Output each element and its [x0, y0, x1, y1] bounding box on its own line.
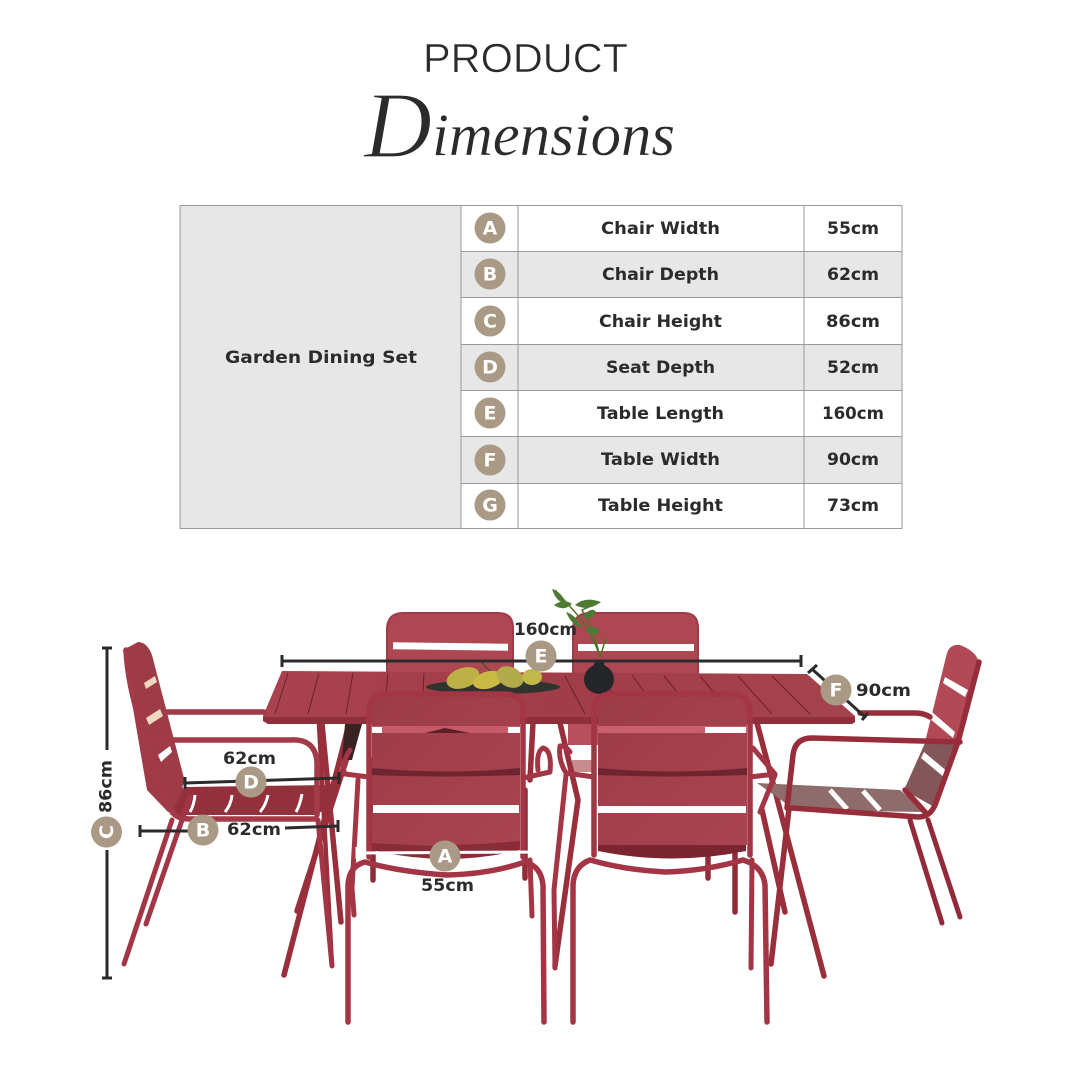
title [362, 35, 675, 178]
row A: Chair Width [601, 219, 720, 238]
title line: Dimensions: imensions [432, 102, 675, 168]
dimension E: table length: E [535, 646, 547, 668]
dimension D: seat depth [185, 749, 339, 798]
table legs [284, 722, 824, 976]
fruit plate [426, 660, 560, 694]
row A: 55cm [827, 219, 879, 238]
seat [170, 785, 336, 815]
dimension D: seat depth: D [243, 772, 259, 794]
row E: E [484, 402, 496, 424]
row D: 52cm [827, 358, 879, 377]
dimension C: chair height: 86cm [96, 760, 116, 813]
dimension D: seat depth: 62cm [223, 749, 276, 768]
row E: 160cm [822, 404, 884, 423]
row A: A [483, 218, 498, 240]
row C [474, 306, 880, 336]
arms [554, 746, 775, 968]
left side chair [123, 642, 336, 966]
row E: Table Length [597, 404, 724, 423]
row C: 86cm [826, 312, 880, 331]
dimension C: chair height: C [96, 825, 118, 839]
title line: PRODUCT: PRODUCT [423, 35, 628, 81]
row B: Chair Depth [602, 265, 719, 284]
row label: Garden Dining Set: Garden Dining Set [225, 348, 417, 367]
legs [124, 797, 332, 966]
title line: Dimensions: D [362, 74, 432, 178]
chair back [598, 697, 747, 845]
legs [910, 820, 960, 923]
table leg shadow [342, 724, 362, 760]
dimension A: chair width [357, 840, 533, 895]
pears [444, 662, 542, 693]
row F: Table Width [601, 450, 720, 469]
arms [343, 748, 550, 916]
row A [474, 212, 879, 244]
dimension A: chair width: 55cm [421, 876, 474, 895]
row B [474, 258, 879, 290]
frame [348, 694, 544, 1022]
dimensions table [180, 205, 902, 528]
row F: 90cm [827, 450, 879, 469]
row B: B [483, 264, 497, 286]
furniture illustration [123, 589, 979, 1022]
dimension annotations [91, 620, 911, 978]
row C: Chair Height [599, 312, 722, 331]
row F: F [484, 450, 496, 472]
dimension E: table length: 160cm [514, 620, 577, 639]
row B: 62cm [827, 265, 879, 284]
dimension B: chair depth [140, 814, 338, 846]
table top [263, 671, 855, 724]
row F [474, 444, 879, 476]
back [123, 642, 190, 812]
dimension E: table length [282, 620, 801, 672]
row D: Seat Depth [606, 358, 715, 377]
frame [573, 694, 767, 1022]
seat [757, 783, 925, 812]
dimension C: chair height [91, 648, 122, 978]
plant and vase [552, 589, 614, 694]
back left chair [373, 613, 525, 880]
front right chair [554, 694, 775, 1022]
dimension A: chair width: A [438, 846, 453, 868]
dimension F: table width [808, 665, 911, 720]
row G [474, 490, 879, 520]
dimension B: chair depth: 62cm [227, 820, 281, 839]
chair back [372, 697, 520, 845]
back right chair [568, 613, 735, 912]
row E [474, 398, 884, 428]
title line: Dimensions [362, 74, 675, 178]
right side chair [757, 645, 979, 923]
row D [474, 352, 879, 382]
dimension F: table width: 90cm [856, 681, 911, 700]
row G: 73cm [827, 496, 879, 515]
dimension F: table width: F [830, 680, 842, 702]
front left chair [343, 694, 550, 1022]
row C: C [483, 310, 497, 332]
back [925, 645, 979, 742]
row D: D [482, 356, 498, 378]
dimension B: chair depth: B [196, 820, 210, 842]
row G: G [482, 494, 498, 516]
row G: Table Height [598, 496, 723, 515]
